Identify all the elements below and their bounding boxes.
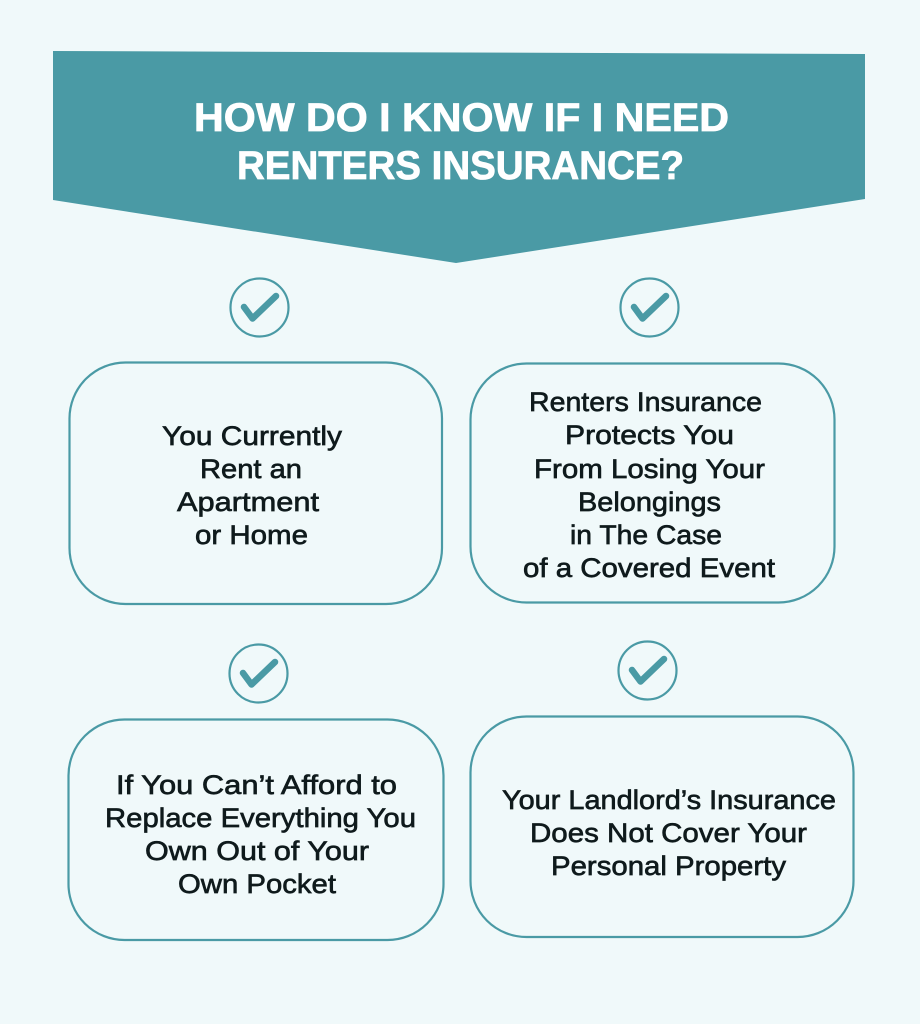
panel: protects belongings: Belongings <box>578 487 721 517</box>
panel: cannot afford to replace: Own Out of Your <box>145 836 369 866</box>
header banner <box>53 51 865 263</box>
icon: check bottom right <box>618 642 676 700</box>
panel: currently rent: or Home <box>195 520 308 550</box>
panel: protects belongings: Protects You <box>565 420 734 450</box>
panel: protects belongings: of a Covered Event <box>523 553 776 583</box>
title: HOW DO I KNOW IF I NEED <box>194 96 729 140</box>
panel: currently rent: Rent an <box>200 454 302 484</box>
icon: check bottom left <box>230 644 288 702</box>
title: RENTERS INSURANCE? <box>237 144 684 188</box>
panel: landlord insurance <box>470 716 854 937</box>
panel: cannot afford to replace: Own Pocket <box>178 869 337 899</box>
panel: currently rent: Apartment <box>177 487 320 517</box>
panel: landlord insurance: Personal Property <box>551 851 787 881</box>
panel: protects belongings: Renters Insurance <box>529 387 762 417</box>
panel: cannot afford to replace: If You Can’t Afford to <box>116 770 397 800</box>
panel: landlord insurance: Your Landlord’s Insurance <box>502 785 836 815</box>
panel: currently rent <box>70 362 442 604</box>
panel: currently rent: You Currently <box>162 421 343 451</box>
icon: check top left <box>230 278 288 336</box>
icon: check top right <box>620 278 678 336</box>
panel: landlord insurance: Does Not Cover Your <box>530 818 807 848</box>
panel: protects belongings <box>470 364 834 602</box>
panel: protects belongings: in The Case <box>570 520 722 550</box>
panel: protects belongings: From Losing Your <box>534 454 765 484</box>
title <box>194 96 729 188</box>
panel: cannot afford to replace: Replace Everything You <box>105 803 416 833</box>
panel: cannot afford to replace <box>68 720 444 940</box>
